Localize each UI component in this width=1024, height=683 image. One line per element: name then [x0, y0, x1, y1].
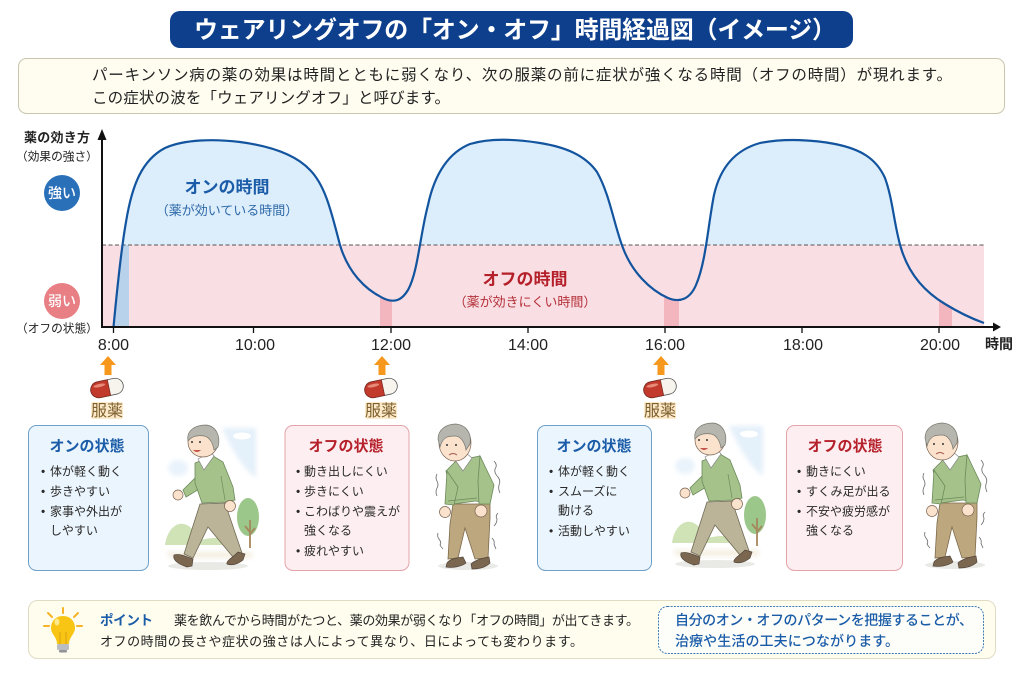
- y axis title: （効果の強さ）: [16, 150, 98, 164]
- panel: off state 1: •: [296, 484, 300, 498]
- off zone band: [102, 245, 984, 327]
- dose marker 16:00: 服薬: [644, 402, 676, 420]
- intro text box: パーキンソン病の薬の効果は時間とともに弱くなり、次の服薬の前に症状が強くなる時間（オフの時間）が現れます。: [92, 66, 952, 84]
- panel: off state 2: •: [797, 484, 801, 498]
- on zone fill under curve: [124, 141, 899, 245]
- dose marker 8:00: [89, 356, 125, 420]
- illustration: stooped man 2: [923, 423, 987, 569]
- panel: on state 1: しやすい: [50, 524, 98, 538]
- on time label: [156, 178, 298, 218]
- panel: off state 1: 疲れやすい: [304, 544, 364, 558]
- effect curve: [114, 140, 984, 327]
- badge: weak: 弱い: [48, 293, 76, 309]
- callout: [658, 606, 984, 654]
- panel: on state 2: 体が軽く動く: [558, 464, 630, 478]
- point text: オフの時間の長さや症状の強さは人によって異なり、日によっても変わります。: [100, 634, 583, 649]
- title: ウェアリングオフの「オン・オフ」時間経過図（イメージ）: [194, 16, 836, 44]
- dose marker 16:00: [642, 356, 678, 420]
- badge: strong: 強い: [48, 185, 76, 201]
- panel: on state 1: •: [41, 504, 45, 518]
- on time label: （薬が効いている時間）: [156, 203, 298, 218]
- threshold dashed line: [102, 244, 985, 246]
- panel: off state 1: [285, 426, 409, 570]
- panel: on state 2: •: [549, 484, 553, 498]
- panel: on state 1: [28, 426, 148, 570]
- panel: on state 1: 家事や外出が: [50, 504, 122, 518]
- panel: off state 2: 動きにくい: [806, 464, 866, 478]
- illustration: walking man 2: [672, 423, 766, 568]
- icon: light bulb: [44, 608, 82, 652]
- panel: off state 2: 不安や疲労感が: [806, 504, 890, 518]
- panel: off state 1: •: [296, 464, 300, 478]
- panel: off state 2: •: [797, 464, 801, 478]
- illustration: walking man 1: [165, 425, 259, 570]
- illustration: stooped man 1: [436, 424, 500, 570]
- y axis title: 薬の効き方: [24, 130, 90, 145]
- panel: on state 2: 活動しやすい: [558, 524, 630, 538]
- off time label: オフの時間: [482, 270, 568, 289]
- panel: off state 2: 強くなる: [806, 524, 854, 538]
- point text: [100, 613, 639, 649]
- panel: off state 1: こわばりや震えが: [304, 504, 400, 518]
- off highlight bars: [380, 296, 952, 327]
- badge: weak: [44, 283, 80, 319]
- panel: off state 2: [786, 426, 902, 570]
- point text: 薬を飲んでから時間がたつと、薬の効果が弱くなり「オフの時間」が出てきます。: [174, 613, 639, 628]
- badge: strong: [44, 175, 80, 211]
- panel: on state 1: 体が軽く動く: [50, 464, 122, 478]
- callout: 治療や生活の工夫につながります。: [675, 633, 899, 649]
- axis time labels: 18:00: [783, 337, 823, 354]
- title: [170, 11, 853, 48]
- panel: on state 1: 歩きやすい: [50, 484, 110, 498]
- off time label: （薬が効きにくい時間）: [454, 294, 596, 310]
- onset highlight: [114, 245, 129, 327]
- panel: on state 1: オンの状態: [49, 437, 125, 455]
- panel: off state 2: オフの状態: [807, 437, 883, 455]
- panel: off state 2: •: [797, 504, 801, 518]
- panel: on state 2: •: [549, 524, 553, 538]
- panel: off state 1: •: [296, 504, 300, 518]
- axis time labels: 8:00: [98, 337, 129, 354]
- panel: on state 2: 動ける: [558, 504, 594, 518]
- panel: on state 2: •: [549, 464, 553, 478]
- panel: on state 1: •: [41, 464, 45, 478]
- dose marker 12:00: [363, 356, 399, 420]
- dose marker 12:00: 服薬: [365, 402, 397, 420]
- intro text box: この症状の波を「ウェアリングオフ」と呼びます。: [92, 89, 450, 107]
- axis time labels: [98, 337, 960, 354]
- intro text box: [18, 58, 1004, 114]
- panel: off state 1: •: [296, 544, 300, 558]
- panel: off state 2: すくみ足が出る: [806, 484, 890, 498]
- dose marker 8:00: 服薬: [91, 402, 123, 420]
- panel: point: [28, 600, 996, 658]
- panel: off state 1: 歩きにくい: [304, 484, 364, 498]
- axes: [98, 129, 1001, 333]
- panel: on state 1: •: [41, 484, 45, 498]
- point label: ポイント: [100, 613, 153, 628]
- off time label: [454, 270, 596, 310]
- on time label: オンの時間: [184, 178, 270, 197]
- y axis low label: （オフの状態）: [16, 322, 98, 336]
- panel: off state 1: 動き出しにくい: [304, 464, 388, 478]
- axis time labels: 20:00: [920, 337, 960, 354]
- axis time labels: 14:00: [508, 337, 548, 354]
- panel: off state 1: 強くなる: [304, 524, 352, 538]
- callout: 自分のオン・オフのパターンを把握することが、: [675, 612, 973, 628]
- panel: on state 2: オンの状態: [556, 437, 632, 455]
- axis time labels: 12:00: [371, 337, 411, 354]
- panel: off state 1: オフの状態: [308, 437, 384, 455]
- chart: on/off time course: [16, 129, 1013, 354]
- panel: on state 2: スムーズに: [558, 484, 617, 498]
- panel: on state 2: [538, 426, 652, 570]
- y axis title: [16, 130, 98, 164]
- axis time labels: 10:00: [235, 337, 275, 354]
- x axis title: 時間: [985, 336, 1013, 352]
- axis time labels: 16:00: [645, 337, 685, 354]
